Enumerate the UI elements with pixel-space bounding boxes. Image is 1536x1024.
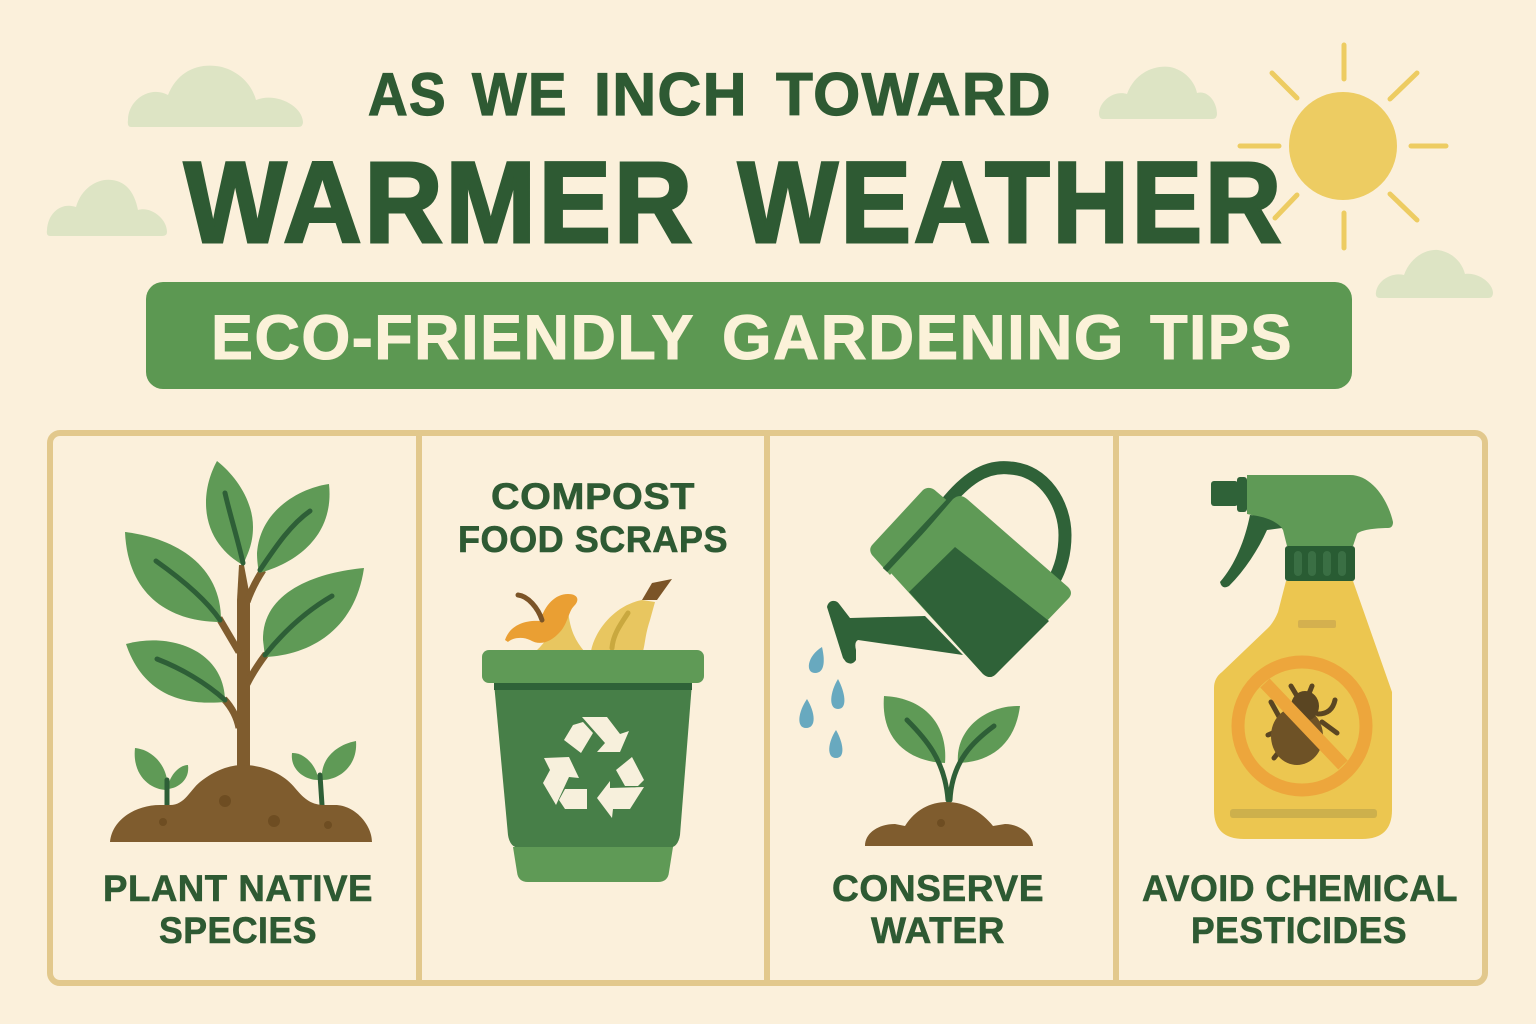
panel: compost food scraps	[458, 476, 728, 882]
icon: seedling	[865, 696, 1033, 846]
title line 2	[184, 139, 1284, 267]
banner text: GARDENING	[722, 303, 1125, 373]
label	[1142, 868, 1458, 951]
label: WATER	[871, 910, 1005, 951]
title line 1: INCH	[594, 61, 748, 128]
panel: conserve water	[799, 468, 1071, 951]
label: CONSERVE	[832, 868, 1044, 909]
icon: water drops	[799, 647, 844, 758]
label	[458, 476, 728, 560]
cloud: right	[1376, 250, 1493, 298]
title line 1: WE	[472, 61, 568, 128]
icon: spray bottle	[1211, 475, 1393, 839]
label: COMPOST	[491, 476, 695, 517]
label: AVOID CHEMICAL	[1142, 868, 1458, 909]
icon: no-bug sign	[1238, 662, 1366, 790]
label: PESTICIDES	[1191, 910, 1407, 951]
icon: watering can	[827, 468, 1071, 677]
banner text: TIPS	[1150, 303, 1293, 373]
title line 2: WEATHER	[738, 139, 1284, 267]
cloud: far left	[47, 180, 167, 236]
banner	[146, 282, 1352, 389]
cloud: top left	[128, 66, 303, 127]
label: FOOD SCRAPS	[458, 519, 728, 560]
title line 2: WARMER	[184, 139, 695, 267]
panel: plant native species	[103, 461, 373, 951]
icon: plant	[110, 461, 372, 842]
panel: avoid chemical pesticides	[1142, 475, 1458, 951]
label: PLANT NATIVE	[103, 868, 373, 909]
icon: compost bin	[482, 579, 704, 882]
icon: recycling symbol	[543, 717, 644, 818]
cloud: top right	[1099, 67, 1217, 119]
banner text: ECO-FRIENDLY	[211, 303, 695, 373]
label	[832, 868, 1044, 951]
title line 1: AS	[368, 61, 447, 128]
label: SPECIES	[159, 910, 317, 951]
title line 1	[368, 61, 1052, 128]
label	[103, 868, 373, 951]
banner text	[211, 303, 1293, 373]
panel frame	[50, 433, 1485, 983]
title line 1: TOWARD	[776, 61, 1052, 128]
icon: sun	[1240, 45, 1446, 248]
